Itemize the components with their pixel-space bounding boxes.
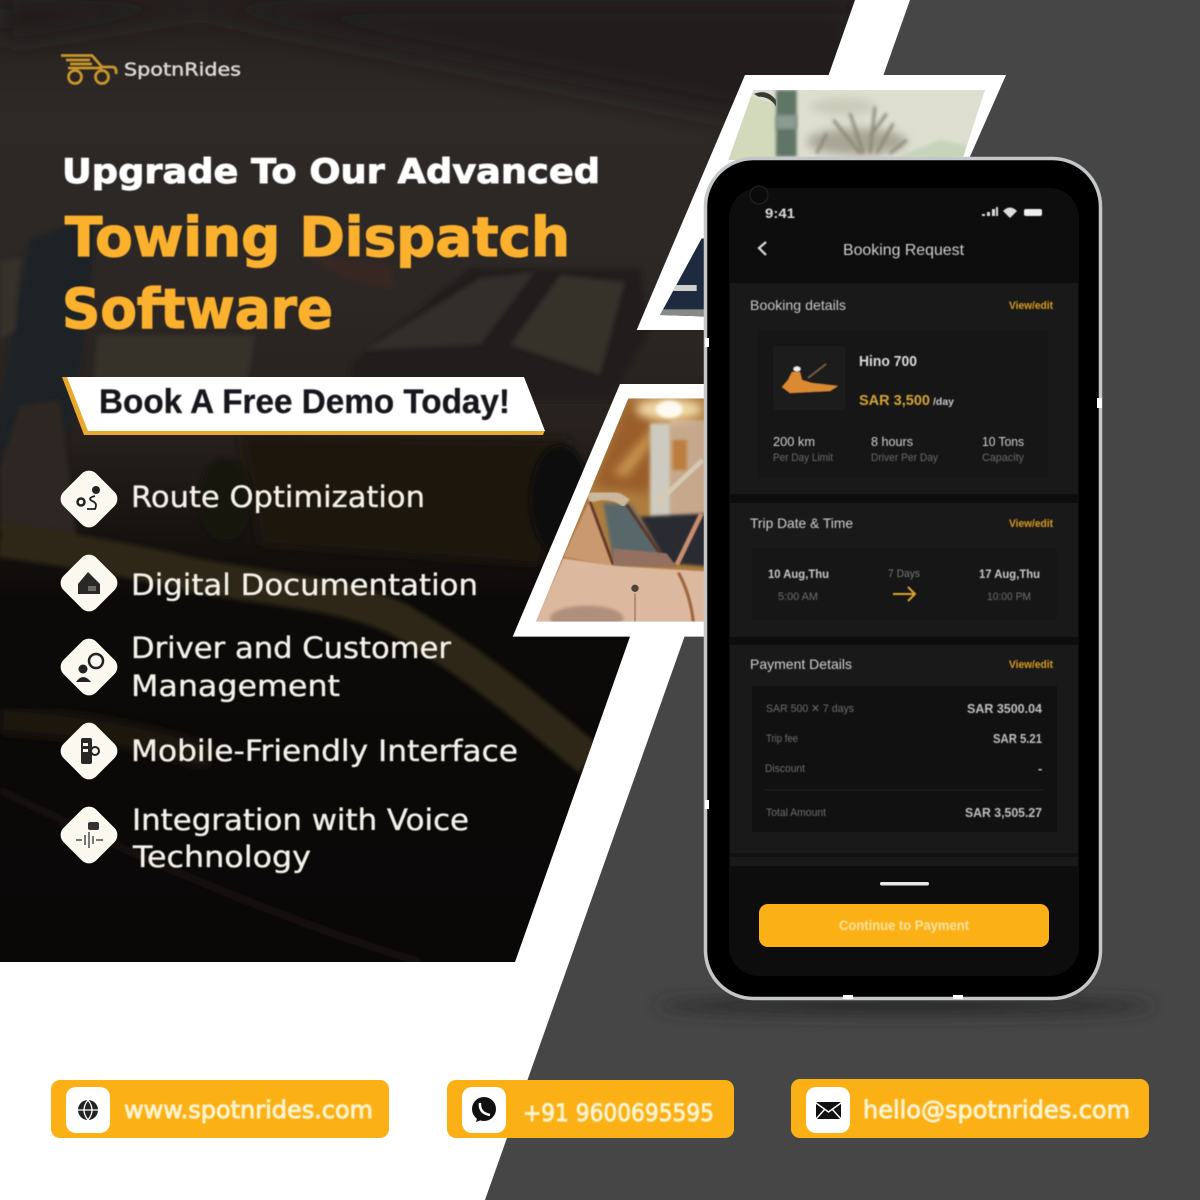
- label: Mobile-Friendly Interface: [131, 734, 518, 768]
- section: booking details: Capacity: [982, 452, 1024, 464]
- thumbnail: tow truck: [773, 346, 845, 410]
- section: payment details: SAR 3500.04: [967, 701, 1043, 716]
- section: trip date and time: Trip Date & Time: [750, 515, 853, 531]
- screen header: Booking Request: Booking Request: [843, 242, 965, 259]
- section: trip date and time: 5:00 AM: [778, 591, 818, 603]
- photo frame: truck in field: [637, 75, 1006, 330]
- section: booking details: Hino 700: [859, 353, 917, 370]
- feature: Driver and Customer Management: Management: [131, 669, 340, 703]
- icon: globe: [66, 1087, 110, 1133]
- background: dark towing photo panel: [0, 0, 860, 965]
- feature: Integration with Voice Technology: Technology: [132, 840, 311, 874]
- section: payment details: Trip fee: [766, 733, 798, 745]
- section: booking details: 8 hours: [871, 434, 913, 449]
- phone shadow: [655, 997, 1155, 1015]
- section: booking details: View/edit: [1009, 300, 1053, 312]
- label: Driver and Customer: [131, 631, 451, 665]
- section: trip date and time: 10 Aug,Thu: [768, 567, 829, 581]
- email text: hello@spotnrides.com: [863, 1096, 1130, 1124]
- icon: documents: [56, 550, 122, 616]
- contact pill: website: [51, 1080, 389, 1138]
- phone body: [705, 158, 1102, 999]
- feature: Integration with Voice Technology: [56, 802, 469, 874]
- heading line: Software: Software: [62, 277, 333, 341]
- section: trip date and time: 7 Days: [888, 568, 920, 580]
- section: payment details: SAR 3,505.27: [965, 805, 1042, 820]
- section: payment details: Payment Details: [750, 656, 852, 672]
- section: payment details: -: [1038, 761, 1042, 776]
- feature: Driver and Customer Management: [56, 631, 451, 703]
- section: booking details: 200 km: [773, 434, 815, 449]
- callout banner: Book A Free Demo Today: Book A Free Demo Today!: [99, 383, 510, 421]
- feature: Route Optimization: [56, 466, 425, 532]
- section: booking details: Booking details: [750, 297, 846, 313]
- section: booking details: /day: [933, 397, 954, 408]
- icon: envelope: [806, 1087, 850, 1133]
- feature: Digital Documentation: [56, 550, 478, 616]
- heading line: Upgrade To Our Advanced: Upgrade To Our Advanced: [62, 152, 600, 192]
- section: trip date and time: [730, 503, 1078, 637]
- phone mockup: [705, 158, 1102, 999]
- logo: SpotnRides: [61, 56, 241, 84]
- section: payment details: [730, 645, 1078, 866]
- photo frame: tow truck in sunlight: [513, 384, 717, 637]
- feature: Mobile-Friendly Interface: [56, 718, 518, 784]
- icon: people: [56, 634, 122, 700]
- callout banner: Book A Free Demo Today: [62, 377, 545, 435]
- section: trip date and time: 17 Aug,Thu: [979, 567, 1040, 581]
- section: booking details: 10 Tons: [982, 434, 1024, 449]
- home indicator: [880, 882, 929, 886]
- section: booking details: SAR 3,500: [859, 392, 930, 409]
- label: Digital Documentation: [131, 568, 478, 602]
- section: trip date and time: View/edit: [1009, 518, 1053, 530]
- icon: voice wave: [56, 802, 122, 868]
- phone number: +91 9600695595: [523, 1099, 714, 1127]
- section: payment details: SAR 500 ✕ 7 days: [766, 703, 854, 715]
- button: Continue to Payment: Continue to Payment: [839, 917, 969, 933]
- contact pill: phone: [447, 1080, 734, 1138]
- icon: mobile: [56, 718, 122, 784]
- status bar: 9:41: [765, 205, 795, 221]
- arrow: [893, 587, 915, 601]
- section: payment details: Total Amount: [766, 807, 826, 819]
- section: payment details: View/edit: [1009, 659, 1053, 671]
- icon: whatsapp: [462, 1087, 506, 1133]
- label: Integration with Voice: [132, 803, 469, 837]
- section: payment details: SAR 5.21: [993, 731, 1042, 746]
- background: dark grey diagonal panel: [485, 0, 1200, 1200]
- label: Route Optimization: [131, 480, 425, 514]
- section: trip date and time: 10:00 PM: [987, 591, 1031, 603]
- title: [62, 152, 600, 341]
- status bar: [765, 205, 1042, 221]
- button: Continue to Payment: [759, 904, 1049, 947]
- screen header: Booking Request: [759, 242, 965, 259]
- logo text: SpotnRides: [124, 60, 241, 80]
- contact pill: email: [791, 1079, 1149, 1138]
- section: booking details: [730, 283, 1078, 494]
- section: booking details: Per Day Limit: [773, 452, 833, 464]
- section: payment details: Discount: [765, 763, 805, 775]
- heading line: Towing Dispatch: Towing Dispatch: [65, 206, 570, 269]
- icon: route pins: [56, 466, 122, 532]
- icon: tow truck logo: [61, 56, 116, 84]
- website text: www.spotnrides.com: [124, 1096, 373, 1124]
- section: booking details: Driver Per Day: [871, 452, 938, 464]
